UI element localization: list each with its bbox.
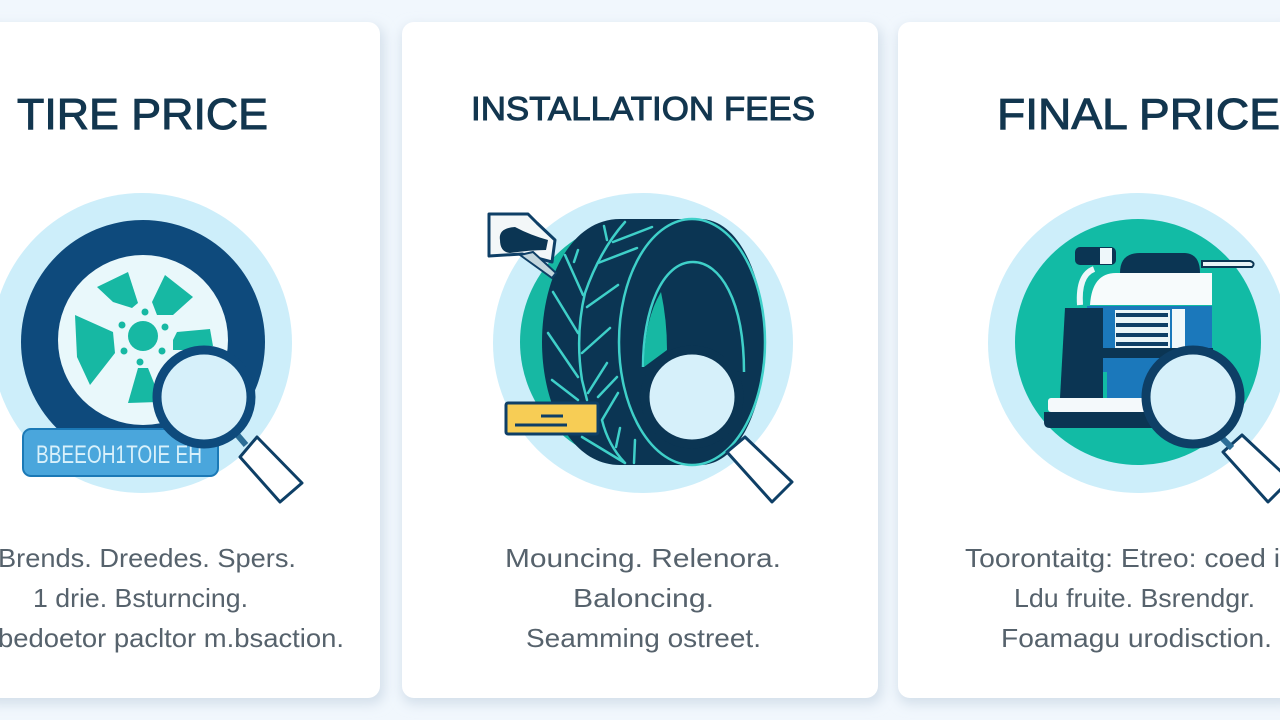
text: tire description [0, 543, 344, 653]
heading: final price: FINAL PRICE [997, 90, 1280, 139]
panel: tire price [0, 22, 384, 704]
icon: tire with magnifier [489, 193, 793, 502]
label: price tag [23, 429, 218, 476]
text: final price description [965, 543, 1280, 653]
icon: yellow tag [506, 403, 598, 434]
label: price tag: BBEEOH1TOIE EH [36, 441, 202, 469]
text: installation description: Mouncing. Relenora. [505, 543, 781, 573]
panel: installation fees [402, 22, 882, 704]
icon: magnifier [645, 350, 792, 502]
icon: magnifier [1146, 350, 1280, 502]
heading: installation fees: INSTALLATION FEES [471, 90, 815, 127]
text: installation description: Seamming ostreet. [526, 623, 761, 653]
text: installation description: Baloncing. [573, 583, 714, 613]
machine [1044, 247, 1254, 428]
icon: machine with magnifier [988, 193, 1280, 502]
text: installation description [505, 543, 781, 653]
text: tire description: Brends. Dreedes. Spers. [0, 543, 296, 573]
text: final price description: Foamagu urodisction. [1001, 623, 1272, 653]
panel: final price [898, 22, 1280, 704]
heading: tire price: TIRE PRICE [17, 90, 268, 139]
icon: magnifier [157, 350, 302, 502]
tread lines [548, 222, 652, 463]
text: tire description: 1 drie. Bsturncing. [33, 583, 248, 613]
icon: valve connector [489, 214, 556, 278]
text: final price description: Ldu fruite. Bsrendgr. [1014, 583, 1255, 613]
icon: wheel with magnifier [0, 193, 302, 502]
text: tire description: bedoetor pacltor m.bsaction. [0, 623, 344, 653]
text: final price description: Toorontaitg: Etreo: coed i [965, 543, 1280, 573]
